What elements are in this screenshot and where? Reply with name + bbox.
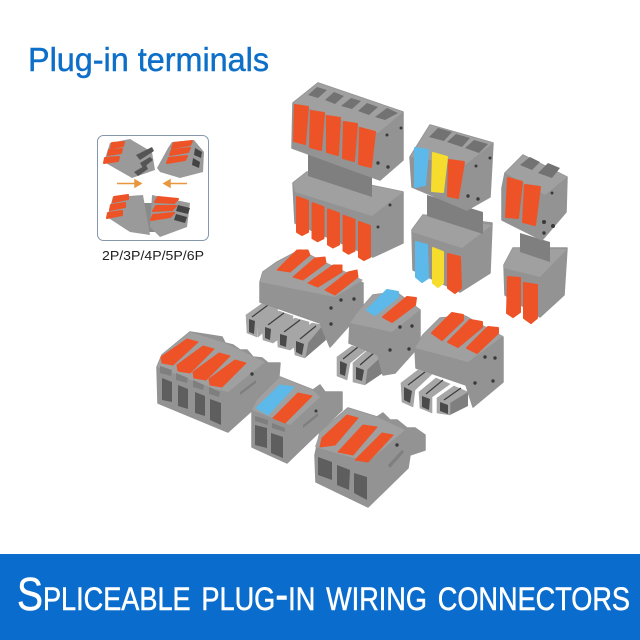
connector: 3-pole socket [315, 408, 425, 507]
banner [0, 554, 640, 640]
icon: joined connectors [107, 195, 190, 237]
connector: 2-pole socket with blue lever [252, 377, 342, 463]
icon: orange arrow left [164, 180, 187, 187]
connector: 2-pole pair [502, 155, 567, 323]
icon: left plug connector [104, 139, 155, 178]
connector: 4-pole plug [246, 250, 363, 358]
caption: pole counts: 2P/3P/4P/5P/6P [102, 249, 204, 263]
connector: 3-pole plug [401, 313, 503, 415]
connector: 2-pole plug with blue lever [337, 290, 420, 385]
connector: 4-pole socket [157, 332, 280, 432]
title: Plug-in terminals [28, 41, 269, 78]
icon: orange arrow right [117, 180, 141, 187]
connector: 3-pole colored pair [410, 125, 493, 293]
icon: right socket connector [157, 140, 204, 178]
panel: inset splicing diagram [98, 136, 208, 240]
connector: 5-pole pair [292, 83, 403, 260]
